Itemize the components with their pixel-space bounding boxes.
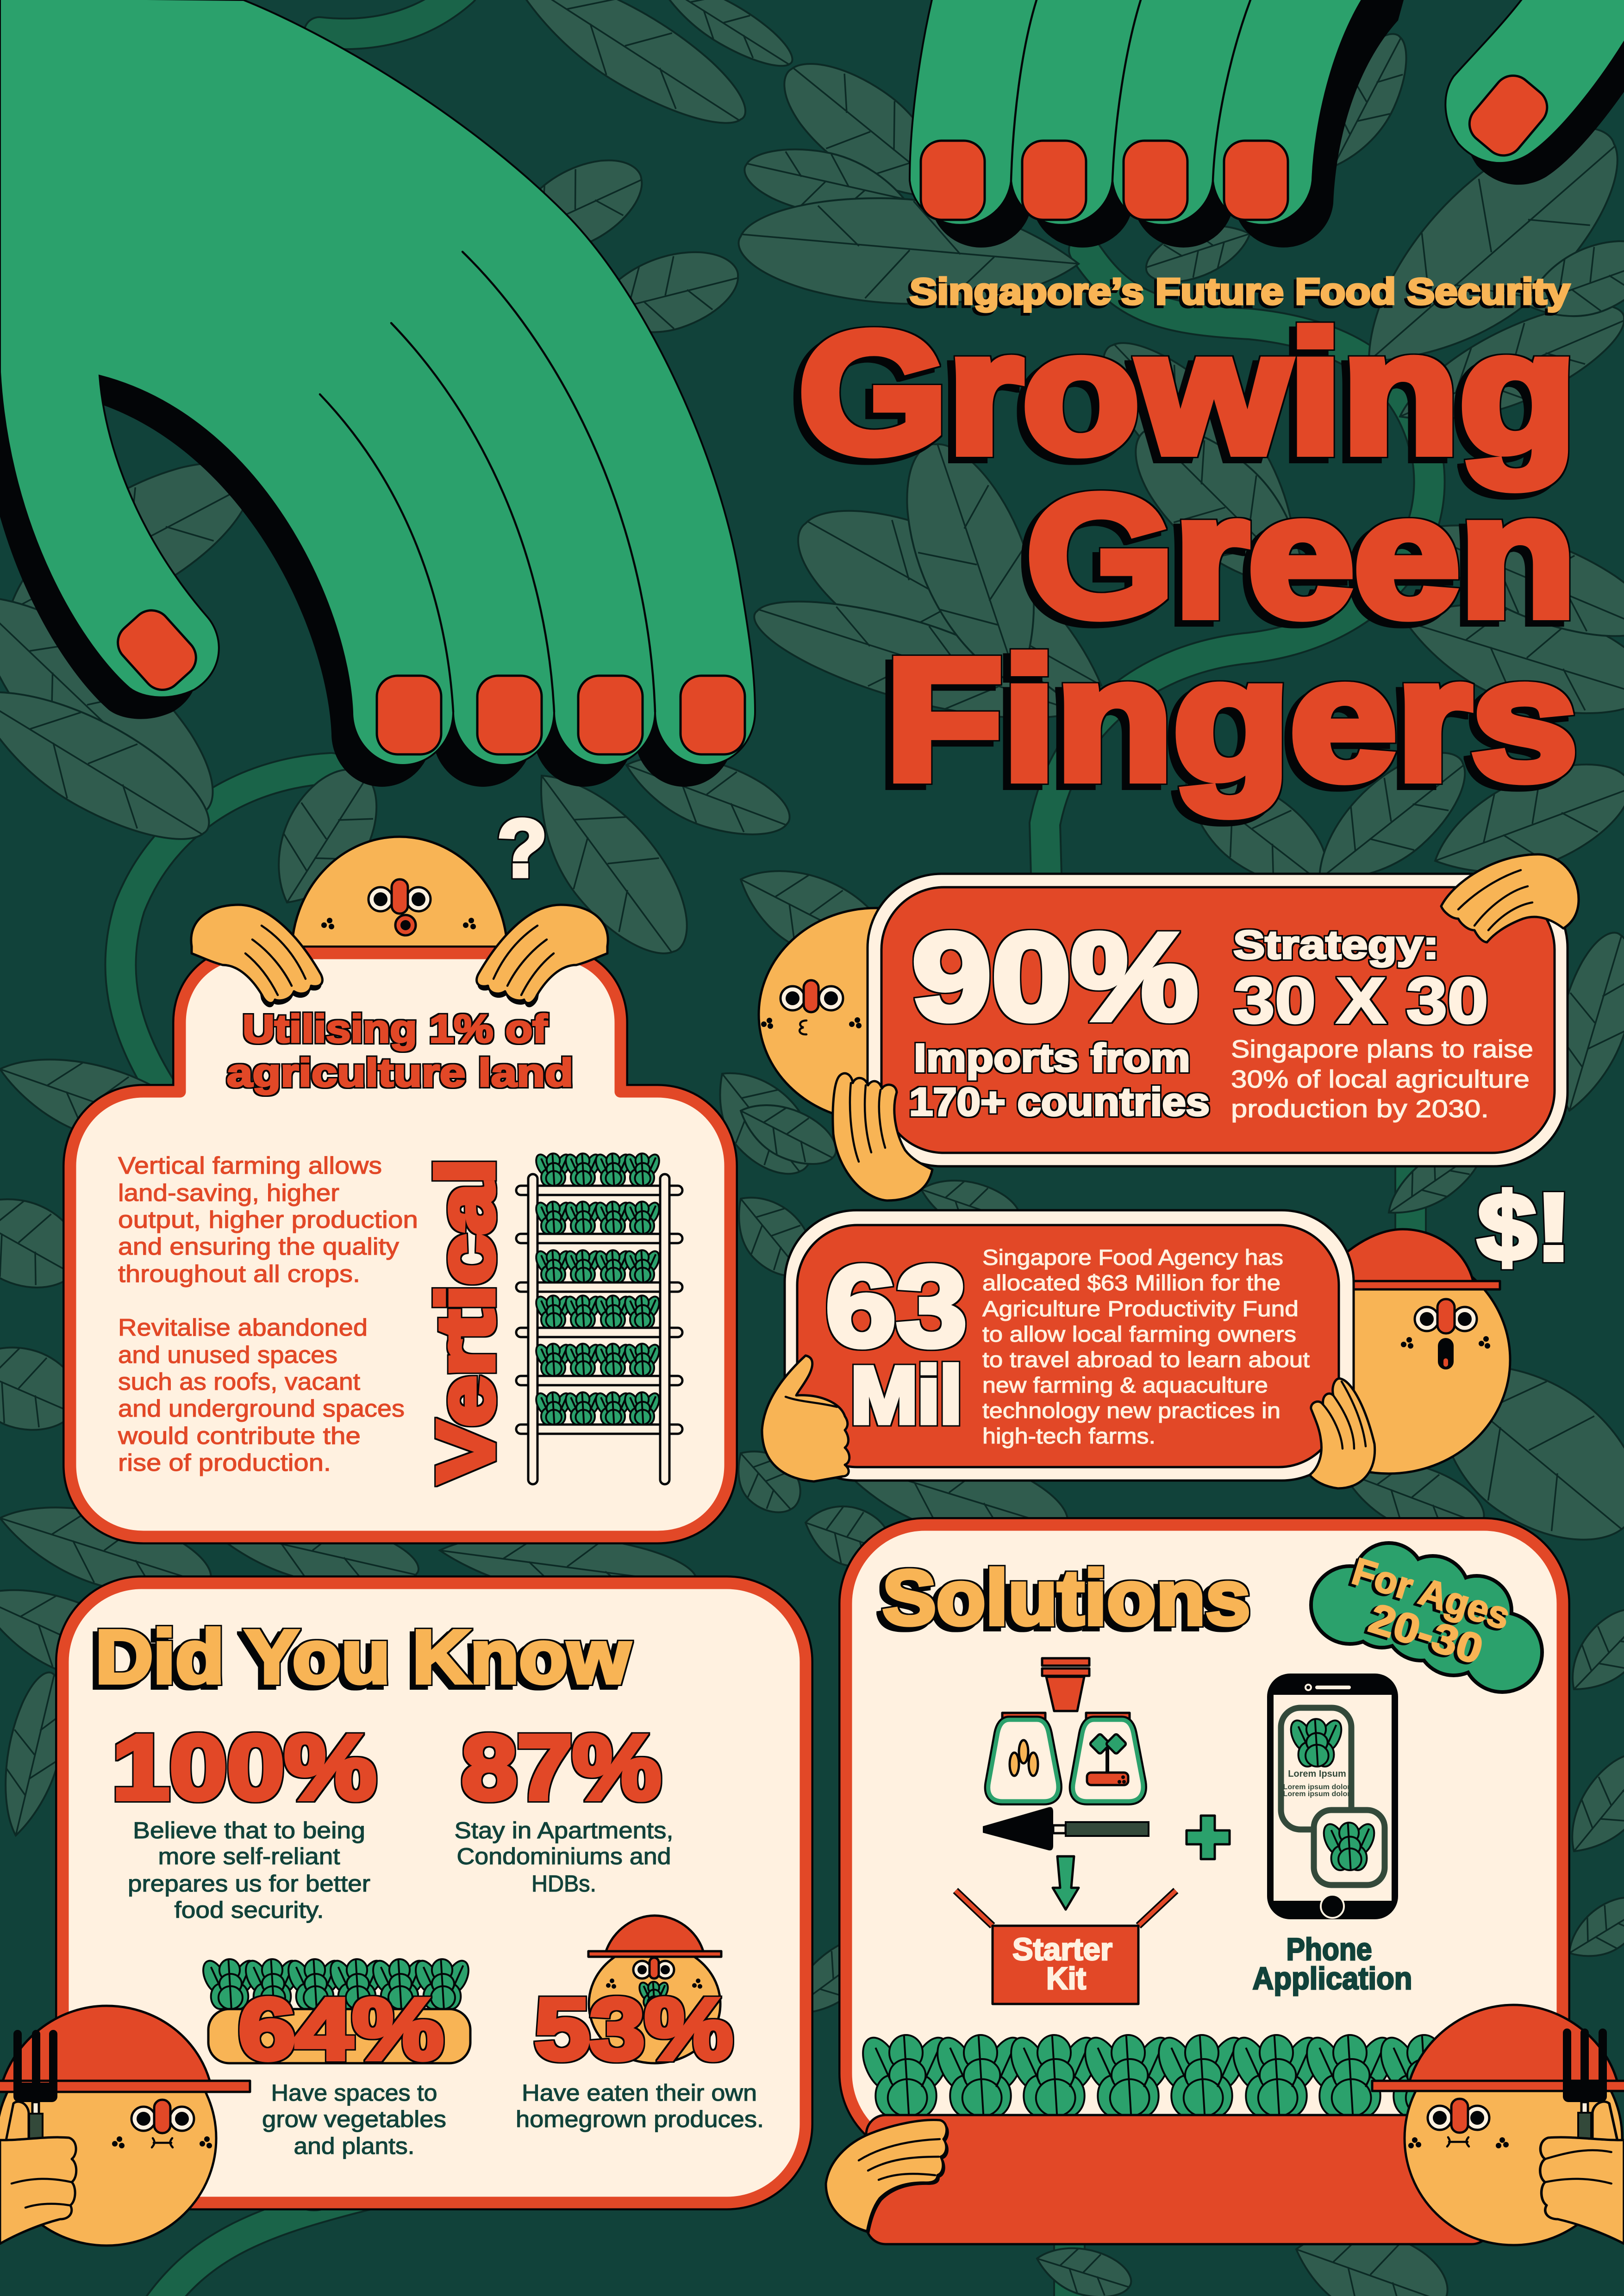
stat text: 87% xyxy=(455,1817,673,1897)
large green hand, top left xyxy=(0,0,755,787)
stat text: 100%: prepares us for better xyxy=(128,1871,370,1897)
heading: utilising 1%: agriculture land xyxy=(227,1051,573,1095)
starter kit box: Starter xyxy=(1012,1932,1112,1967)
heading: solutions: Solutions xyxy=(882,1554,1250,1641)
body text: vertical farming xyxy=(118,1152,418,1476)
stat text: 100%: Believe that to being xyxy=(133,1817,365,1843)
icon: fork xyxy=(1563,2028,1607,2140)
body text: vertical farming: and ensuring the quality xyxy=(118,1233,399,1260)
panel: vertical farming xyxy=(70,905,730,1537)
fund text: to travel abroad to learn about xyxy=(982,1347,1310,1372)
stat text: 53%: Have eaten their own xyxy=(522,2080,757,2106)
heading: utilising 1%: Utilising 1% of xyxy=(243,1007,548,1051)
title xyxy=(799,296,1578,816)
farmer hand xyxy=(1540,2102,1624,2244)
hand: holding banner xyxy=(826,2120,949,2234)
stat: 53%: 53% xyxy=(535,1980,733,2078)
body text: vertical farming: Vertical farming allows xyxy=(118,1152,382,1179)
strategy text: 30% of local agriculture xyxy=(1231,1065,1530,1093)
body text: vertical farming: and unused spaces xyxy=(118,1342,337,1369)
green fingers, top centre xyxy=(910,0,1405,248)
panel: solutions xyxy=(846,1525,1562,2244)
subtitle: Singapore’s Future Food Security xyxy=(910,271,1570,312)
character with cap behind 63 Mil panel xyxy=(1268,1229,1510,1474)
panel: 63 million fund xyxy=(785,1210,1354,1481)
stat text: 87%: HDBs. xyxy=(531,1871,596,1897)
icon: sprout packet xyxy=(1073,1713,1143,1801)
planter with vegetables xyxy=(199,1957,473,2063)
fund text: allocated $63 Million for the xyxy=(982,1270,1280,1295)
body text: vertical farming: such as roofs, vacant xyxy=(118,1369,361,1395)
stat text: 64%: grow vegetables xyxy=(262,2106,446,2132)
plus sign xyxy=(1187,1816,1230,1859)
stat text: 100% xyxy=(128,1817,370,1923)
stat: 64%: 64% xyxy=(238,1980,443,2078)
stat: 63 Mil xyxy=(825,1242,967,1440)
icon: phone application: Lorem ipsum dolor xyxy=(1283,1783,1350,1791)
red planter banner xyxy=(866,2115,1491,2244)
body text: vertical farming: throughout all crops. xyxy=(118,1261,360,1288)
title: Fingers xyxy=(886,623,1578,816)
icon: phone application: Lorem Ipsum xyxy=(1288,1769,1346,1779)
fund text: new farming & aquaculture xyxy=(982,1373,1268,1397)
character behind 90% panel xyxy=(759,908,993,1121)
hand: thumbs up, left of 63 Mil panel xyxy=(762,1356,849,1481)
icon: seed packet xyxy=(988,1713,1058,1801)
stat: 87%: 87% xyxy=(462,1716,661,1818)
starter kit box: Kit xyxy=(1046,1961,1086,1996)
strategy heading xyxy=(1233,923,1488,1037)
label: imports from 170+ countries: Imports from xyxy=(914,1036,1190,1080)
heading: did you know: Did You Know xyxy=(95,1614,631,1699)
icon: phone application: Lorem ipsum dolor xyxy=(1283,1790,1350,1798)
label: phone application: Phone xyxy=(1286,1932,1372,1967)
strategy text xyxy=(1231,1035,1533,1123)
body text: vertical farming: would contribute the xyxy=(118,1423,361,1450)
fund text: to allow local farming owners xyxy=(982,1322,1296,1346)
arrow: into starter kit xyxy=(1053,1856,1079,1910)
fund text: Agriculture Productivity Fund xyxy=(982,1296,1299,1321)
strategy heading: Strategy: xyxy=(1233,923,1439,967)
stat text: 100%: more self-reliant xyxy=(158,1843,340,1869)
stat text: 87%: Condominiums and xyxy=(456,1843,671,1869)
hand: lower left of 90% panel xyxy=(833,1073,932,1201)
stat text: 53%: homegrown produces. xyxy=(516,2106,764,2132)
icon: fork xyxy=(13,2030,57,2141)
icon: flower pots xyxy=(1042,1658,1089,1711)
green thumb, top right xyxy=(1445,0,1624,185)
body text: vertical farming: Revitalise abandoned xyxy=(118,1314,368,1341)
stat: 63 Mil: 63 xyxy=(825,1242,967,1370)
panel: 90% imports and strategy xyxy=(868,874,1568,1166)
badge: for ages 20-30 xyxy=(1311,1543,1542,1692)
hand: top right of 90% panel xyxy=(1441,854,1579,942)
title: Growing xyxy=(799,296,1576,490)
body text: vertical farming: output, higher production xyxy=(118,1207,418,1233)
stat: 90%: 90% xyxy=(912,907,1198,1046)
hand: right of 63 Mil panel xyxy=(1310,1378,1375,1488)
stat text: 53% xyxy=(516,2080,764,2132)
row of vegetables xyxy=(856,2032,1474,2116)
character head behind vertical farming panel xyxy=(292,837,507,1070)
body text: vertical farming: and underground spaces xyxy=(118,1395,405,1422)
fund text: high-tech farms. xyxy=(982,1424,1156,1448)
stat: 100%: 100% xyxy=(112,1716,376,1818)
fund text: technology new practices in xyxy=(982,1398,1280,1423)
badge: for ages 20-30: 20-30 xyxy=(1364,1595,1488,1673)
stat text: 87%: Stay in Apartments, xyxy=(455,1817,673,1843)
question mark: ? xyxy=(498,803,547,894)
badge: for ages 20-30: For Ages xyxy=(1348,1550,1515,1638)
farmer character, bottom right xyxy=(1372,2005,1624,2245)
vertical farming rack xyxy=(516,1152,682,1484)
farmer character, bottom left xyxy=(0,2006,250,2246)
fund text: Singapore Food Agency has xyxy=(982,1245,1283,1269)
strategy text: Singapore plans to raise xyxy=(1231,1035,1533,1063)
stat: 63 Mil: Mil xyxy=(851,1350,962,1440)
farmer hand xyxy=(0,2102,76,2244)
stat text: 100%: food security. xyxy=(174,1897,324,1923)
icon: phone application xyxy=(1267,1674,1398,1919)
label: phone application xyxy=(1253,1932,1412,1996)
label: imports from 170+ countries xyxy=(909,1036,1210,1124)
icon: trowel xyxy=(983,1807,1149,1850)
strategy heading: 30 X 30 xyxy=(1234,964,1488,1037)
stat text: 64%: and plants. xyxy=(294,2133,415,2159)
label: phone application: Application xyxy=(1253,1961,1412,1996)
exclamation: $! xyxy=(1478,1174,1571,1280)
label: imports from 170+ countries: 170+ countries xyxy=(909,1080,1210,1124)
rotated word: vertical: Vertical xyxy=(421,1158,510,1482)
strategy text: production by 2030. xyxy=(1231,1095,1489,1123)
body text: vertical farming: land-saving, higher xyxy=(118,1180,339,1207)
title: Green xyxy=(1026,460,1576,652)
hands gripping the panel xyxy=(191,905,608,1007)
starter kit box xyxy=(956,1891,1176,2004)
stat text: 64% xyxy=(262,2080,446,2159)
fund text xyxy=(982,1245,1310,1448)
stat text: 64%: Have spaces to xyxy=(271,2080,437,2106)
character eating a vegetable xyxy=(588,1916,721,2063)
body text: vertical farming: rise of production. xyxy=(118,1450,331,1476)
panel: did you know xyxy=(63,1583,806,2203)
heading: utilising 1% xyxy=(227,1007,573,1095)
